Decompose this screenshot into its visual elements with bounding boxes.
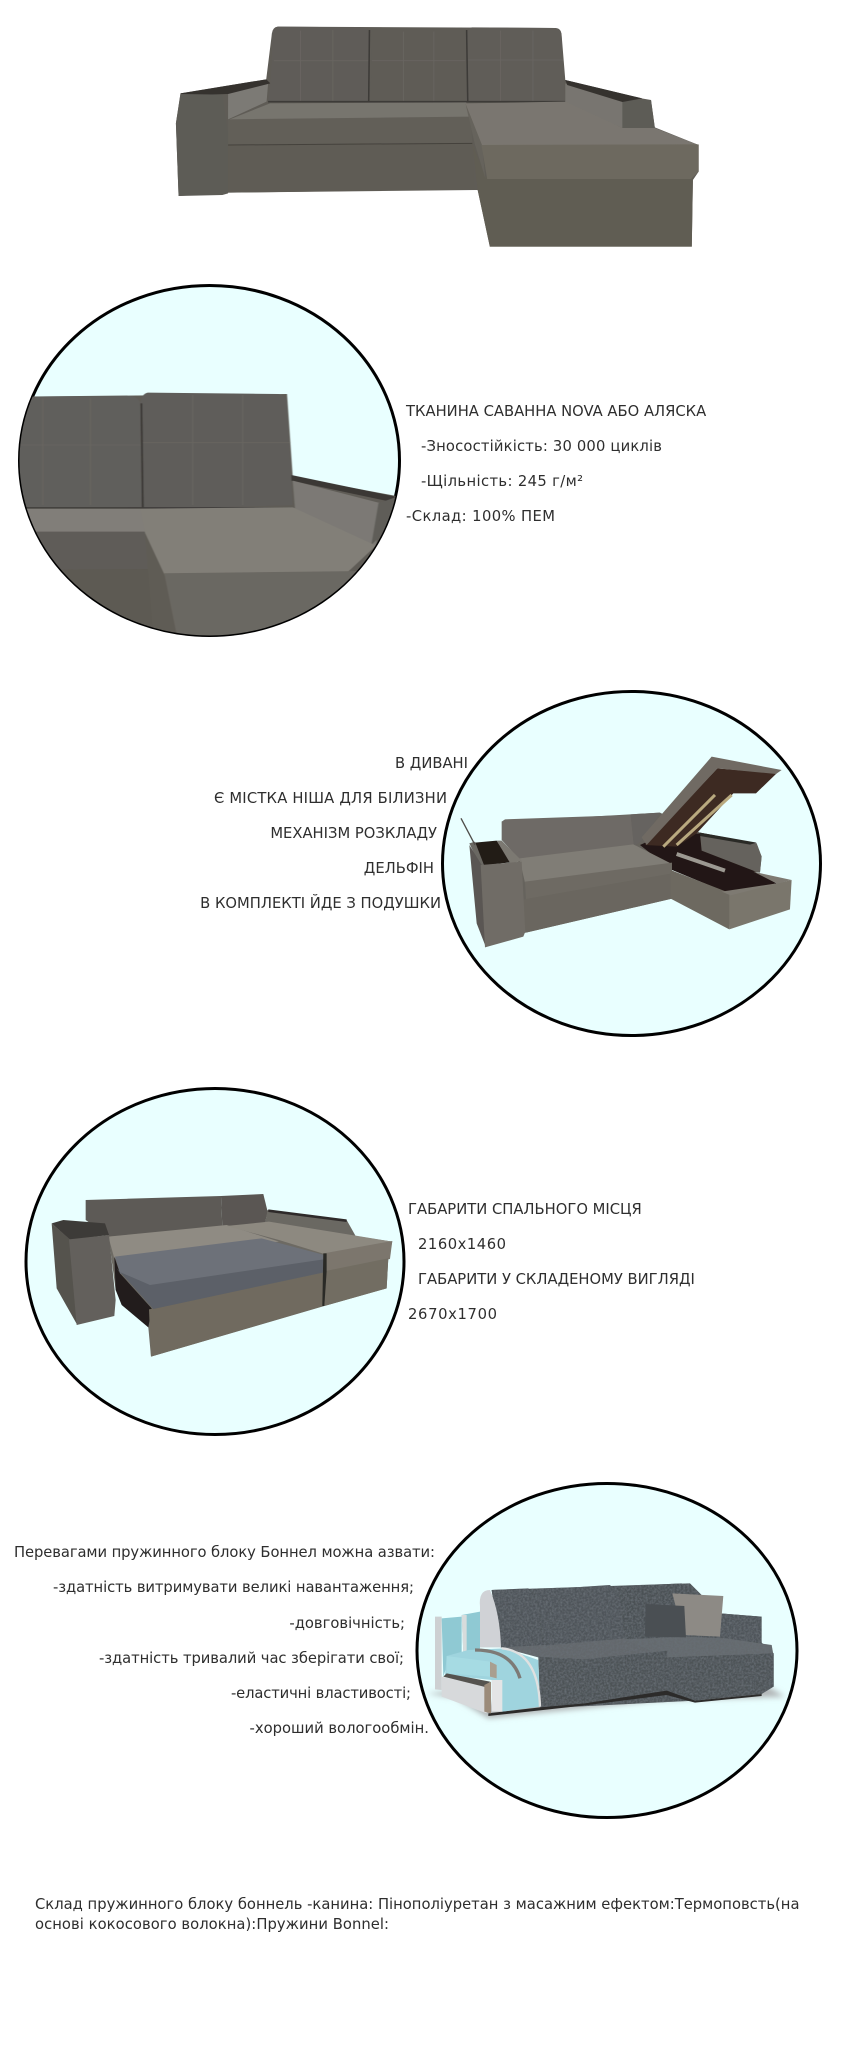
photo: sofa cutaway with springs <box>427 1583 785 1718</box>
right armrest <box>565 80 655 128</box>
text: storage and mechanism: В ДИВАНІ <box>395 755 468 772</box>
text: storage and mechanism: В КОМПЛЕКТІ ЙДЕ З ПОДУШКИ <box>200 894 441 912</box>
circle: fabric background <box>20 286 400 636</box>
panel: dimensions <box>26 1088 404 1434</box>
text: spring block benefits: -здатність витримувати великі навантаження; <box>53 1579 414 1596</box>
photo: sofa with open storage <box>461 757 792 947</box>
text: storage and mechanism <box>200 755 468 912</box>
text: dimensions: 2160x1460 <box>418 1236 506 1253</box>
text: spring block benefits: -довговічність; <box>289 1615 405 1632</box>
text: spring block benefits <box>14 1544 435 1737</box>
text: fabric specs: -Зносостійкість: 30 000 циклів <box>421 438 662 455</box>
text: spring block composition <box>35 1896 800 1933</box>
panel: spring block <box>417 1484 797 1818</box>
back cushions <box>268 27 565 102</box>
chaise longue <box>465 102 699 247</box>
text: dimensions: 2670x1700 <box>408 1306 497 1323</box>
text: fabric specs <box>405 403 706 525</box>
photo: sofa seat close-up <box>14 393 400 637</box>
text: fabric specs: -Щільність: 245 г/м² <box>421 473 583 490</box>
text: storage and mechanism: Є МІСТКА НІША ДЛЯ БІЛИЗНИ <box>214 790 447 807</box>
photo: unfolded sofa <box>52 1194 392 1357</box>
text: dimensions: ГАБАРИТИ У СКЛАДЕНОМУ ВИГЛЯДІ <box>418 1271 695 1288</box>
text: storage and mechanism: МЕХАНІЗМ РОЗКЛАДУ <box>270 825 437 842</box>
main seat <box>228 102 475 193</box>
panel: fabric <box>14 286 400 637</box>
text: fabric specs: ТКАНИНА САВАННА NOVA АБО АЛЯСКА <box>405 403 706 420</box>
hero photo: corner sofa <box>176 27 699 247</box>
circle: dimensions background <box>26 1088 404 1434</box>
panel: storage <box>442 692 820 1036</box>
circle: storage background <box>442 692 820 1036</box>
text: spring block benefits: -хороший вологообмін. <box>250 1720 429 1737</box>
text: spring block composition: основі кокосового волокна):Пружини Bonnel: <box>35 1916 389 1933</box>
text: spring block benefits: -здатність тривалий час зберігати свої; <box>99 1650 404 1667</box>
text: dimensions <box>408 1201 695 1323</box>
text: spring block benefits: Перевагами пружинного блоку Боннел можна азвати: <box>14 1544 435 1561</box>
text: dimensions: ГАБАРИТИ СПАЛЬНОГО МІСЦЯ <box>408 1201 642 1218</box>
text: spring block composition: Склад пружинного блоку боннель -канина: Пінополіуретан з масажним ефектом:Термоповсть(на <box>35 1896 800 1913</box>
sofa silhouette <box>176 27 699 247</box>
left armrest <box>176 79 270 196</box>
text: storage and mechanism: ДЕЛЬФІН <box>364 860 434 877</box>
text: fabric specs: -Склад: 100% ПЕМ <box>406 508 555 525</box>
text: spring block benefits: -еластичні властивості; <box>231 1685 411 1702</box>
circle: spring block background <box>417 1484 797 1818</box>
